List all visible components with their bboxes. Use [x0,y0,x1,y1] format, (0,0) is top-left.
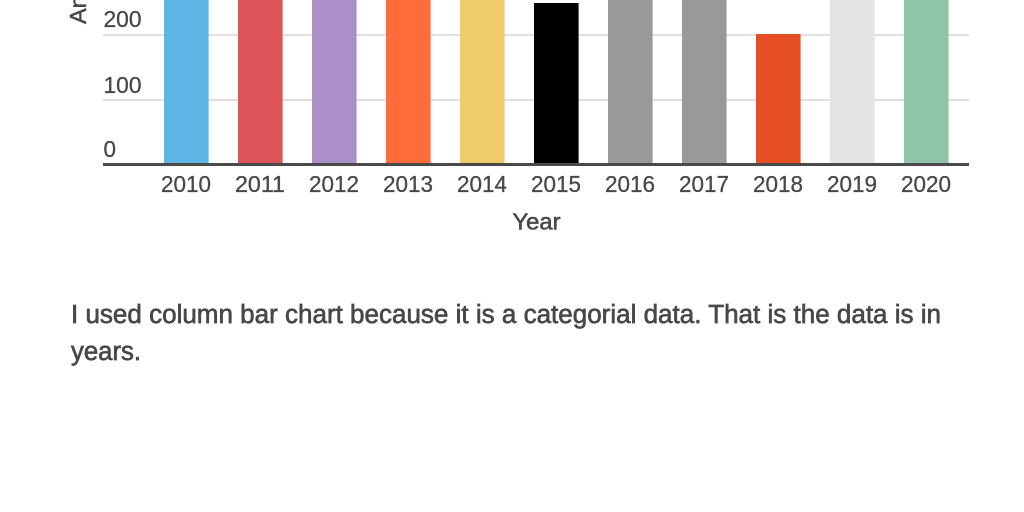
x axis labels: 2016 [605,171,655,197]
x axis labels: 2013 [383,171,433,197]
y axis labels: 200 [104,6,142,32]
x axis labels: 2010 [161,171,211,197]
y axis labels: 0 [104,136,116,162]
y axis labels: 100 [104,72,142,98]
x axis labels: 2014 [457,171,507,197]
x axis labels: 2019 [827,171,877,197]
x axis title: Year [512,208,561,234]
caption text [71,301,941,366]
x axis labels: 2012 [309,171,359,197]
caption text: I used column bar chart because it is a categorial data. That is the data is in [71,301,941,329]
x axis labels: 2018 [753,171,803,197]
x axis labels [161,171,951,197]
x axis labels: 2017 [679,171,729,197]
x axis line [103,163,969,166]
caption text: years. [71,338,141,366]
x axis labels: 2011 [235,171,285,197]
x axis labels: 2015 [531,171,581,197]
bars [164,0,949,164]
y axis labels [104,6,142,162]
x axis labels: 2020 [901,171,951,197]
